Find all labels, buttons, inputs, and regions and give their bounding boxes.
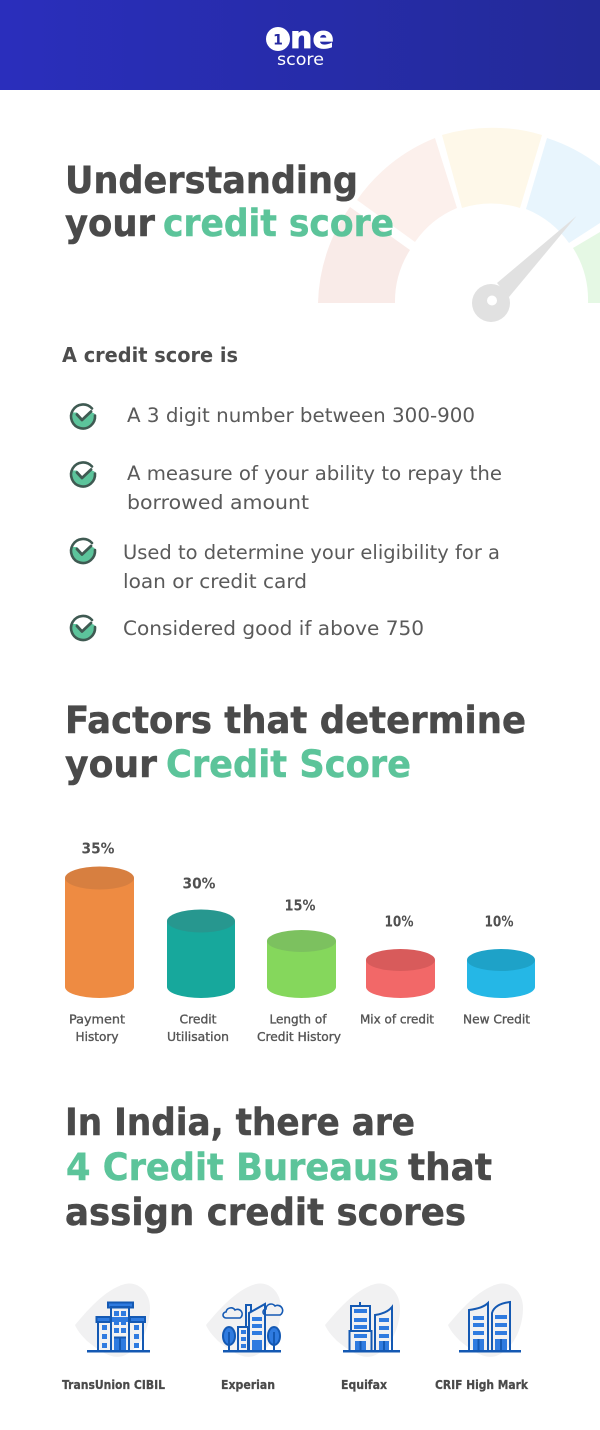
cylinder chart <box>65 840 535 1044</box>
bar: credit utilisation 30%: Credit <box>180 1012 217 1026</box>
bar: payment history 35% <box>65 840 134 1044</box>
gauge graphic <box>318 128 600 322</box>
item: 3 digit number: A 3 digit number between 300-900 <box>127 404 475 427</box>
bar: new credit 10%: 10% <box>484 912 514 930</box>
bar: credit utilisation 30% <box>167 874 235 1044</box>
logo: one score <box>266 21 334 70</box>
item: ability to repay <box>71 462 502 514</box>
bureau: TransUnion CIBIL: TransUnion CIBIL <box>62 1378 165 1392</box>
bar: payment history 35%: 35% <box>82 840 114 858</box>
bar: credit utilisation 30%: Utilisation <box>167 1030 229 1044</box>
heading: credit bureaus: that <box>408 1145 492 1189</box>
logo: one score: 1 <box>273 32 283 48</box>
heading: credit bureaus: 4 Credit Bureaus <box>66 1145 399 1189</box>
checklist <box>71 404 502 640</box>
title: your <box>65 201 155 245</box>
bureau: CRIF High Mark: CRIF High Mark <box>435 1378 529 1392</box>
bar: new credit 10%: New Credit <box>463 1012 530 1026</box>
item: good above 750: Considered good if above 750 <box>123 617 424 640</box>
logo: one score: score <box>277 50 324 70</box>
item: ability to repay: borrowed amount <box>127 491 309 514</box>
heading: credit bureaus: In India, there are <box>65 1100 415 1144</box>
bar: payment history 35%: History <box>76 1030 118 1044</box>
bureau: Equifax <box>325 1284 400 1392</box>
title: Understanding <box>65 158 358 202</box>
bureau: Experian: Experian <box>221 1378 275 1392</box>
bureau: CRIF High Mark <box>435 1284 529 1392</box>
logo: one score: ne <box>290 21 334 56</box>
header band <box>0 0 600 90</box>
bar: length of credit history 15%: Length of <box>270 1012 327 1026</box>
gauge needle <box>472 216 576 322</box>
bureau: Experian <box>206 1284 283 1392</box>
bureau: Equifax: Equifax <box>341 1378 387 1392</box>
bureau: TransUnion CIBIL <box>62 1284 165 1392</box>
heading: factors: your <box>65 742 157 786</box>
title <box>65 158 394 245</box>
heading: credit bureaus: assign credit scores <box>65 1190 466 1234</box>
bar: length of credit history 15%: Credit History <box>257 1030 341 1044</box>
bar: length of credit history 15%: 15% <box>284 896 316 914</box>
subheading: a credit score is: A credit score is <box>62 343 238 367</box>
bureaus row <box>62 1284 529 1392</box>
item: ability to repay: A measure of your ability to repay the <box>127 462 502 485</box>
title: credit score <box>163 201 394 245</box>
bar: payment history 35%: Payment <box>69 1012 125 1026</box>
heading: factors: Factors that determine <box>65 698 526 742</box>
bar: length of credit history 15% <box>257 896 341 1044</box>
bar: mix of credit 10%: 10% <box>384 912 414 930</box>
item: eligibility: loan or credit card <box>123 570 307 593</box>
heading: factors <box>65 698 526 786</box>
bar: mix of credit 10%: Mix of credit <box>360 1012 434 1026</box>
heading: factors: Credit Score <box>166 742 411 786</box>
heading: credit bureaus <box>65 1100 492 1234</box>
bar: new credit 10% <box>463 912 535 1026</box>
bar: credit utilisation 30%: 30% <box>182 874 216 892</box>
bar: mix of credit 10% <box>360 912 435 1026</box>
item: eligibility: Used to determine your eligibility for a <box>123 541 500 564</box>
item: eligibility <box>71 539 500 593</box>
